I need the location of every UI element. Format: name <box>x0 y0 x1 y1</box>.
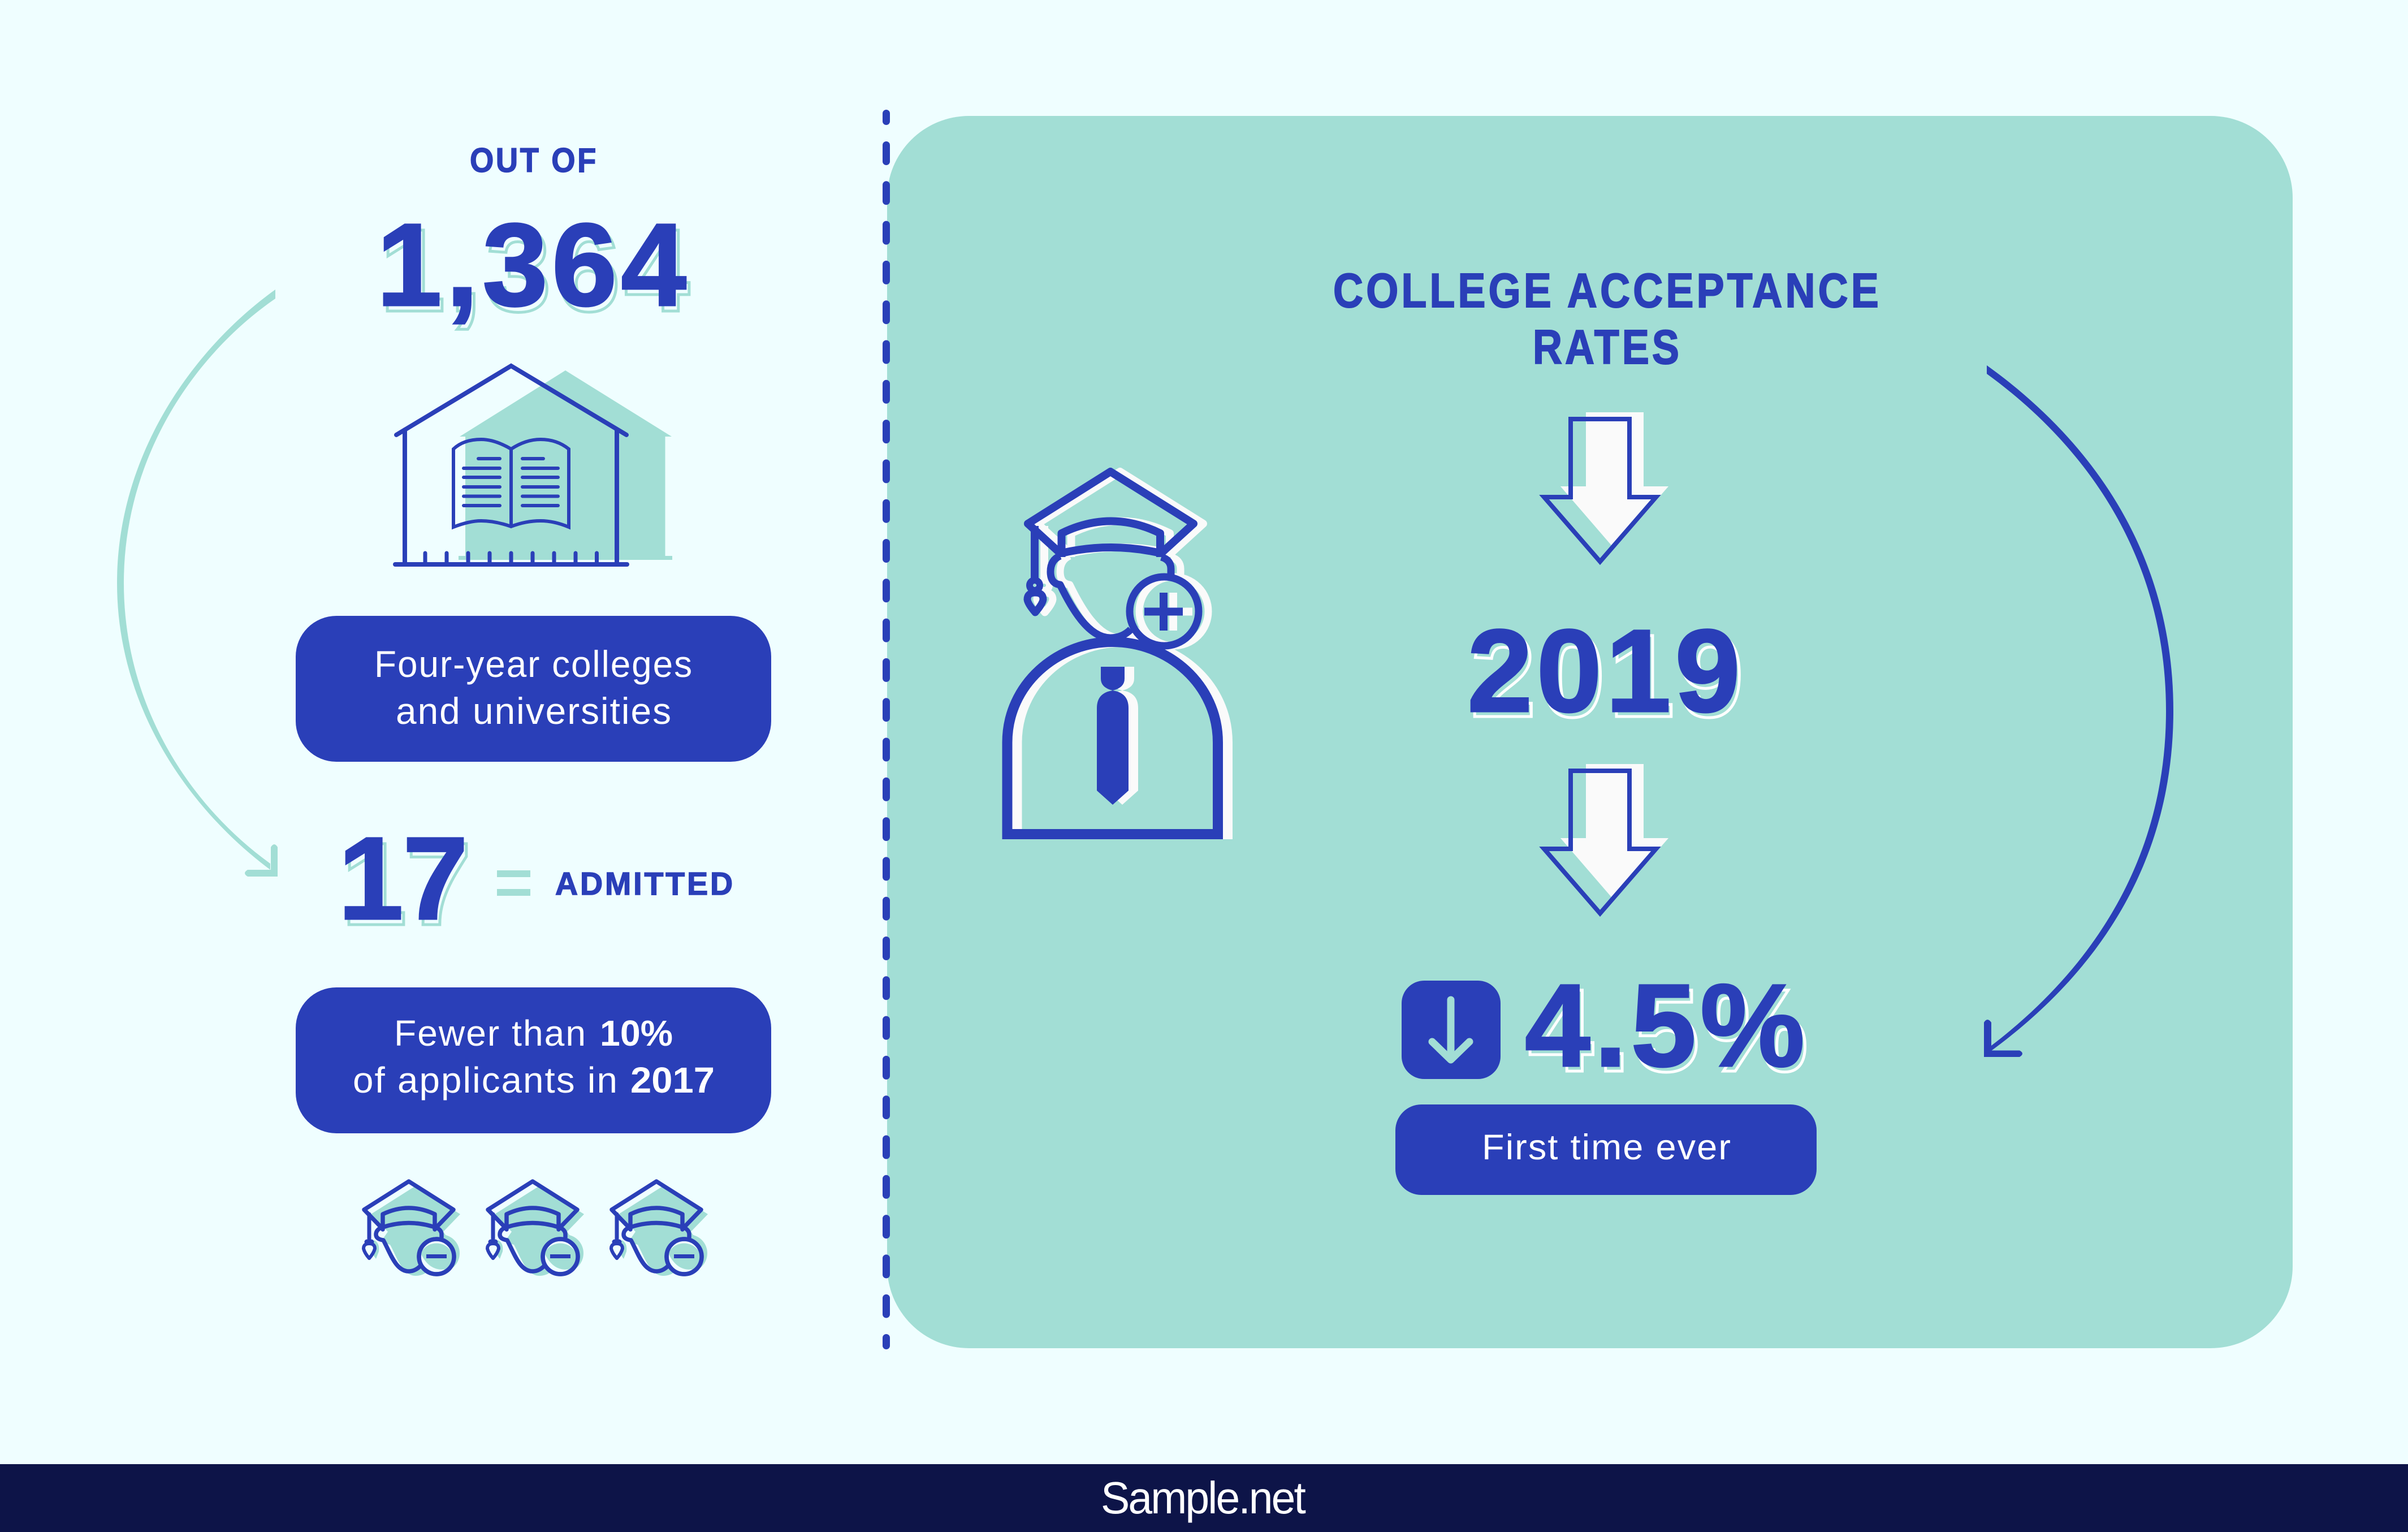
number: 1,364: 1,364 <box>380 205 690 336</box>
number: 2019: 2019 <box>1471 611 1744 742</box>
icon: accepted graduate <box>1008 472 1227 834</box>
pill: fewer than 10%: 10% <box>600 1013 673 1054</box>
icon part: teal house shadow <box>459 370 672 560</box>
pill: fewer than 10% <box>296 987 771 1133</box>
icon: rejected graduate 2 <box>487 1181 584 1276</box>
heading: college acceptance rates: RATES <box>1533 321 1682 374</box>
number: 17: 17 <box>338 813 468 944</box>
pill: fewer than 10%: of applicants in <box>353 1060 619 1101</box>
pill: four-year colleges: Four-year colleges <box>374 643 693 685</box>
equals sign <box>497 870 530 896</box>
number: 2019: 2019 <box>1467 606 1740 737</box>
number: 4.5%: 4.5% <box>1528 965 1808 1097</box>
icon: down arrow badge <box>1402 981 1501 1079</box>
icon part: house outline <box>395 366 627 564</box>
heading: college acceptance rates <box>1333 264 1882 374</box>
icon part: open book <box>453 439 569 527</box>
number: 1,364: 1,364 <box>377 200 686 331</box>
pill: first time ever: First time ever <box>1482 1128 1732 1167</box>
dashed divider <box>883 113 890 1346</box>
number: 17: 17 <box>341 819 472 950</box>
footer text: Sample.net <box>1101 1473 1306 1523</box>
heading: college acceptance rates: COLLEGE ACCEPTANCE <box>1333 264 1882 318</box>
pill: first time ever <box>1395 1104 1817 1195</box>
arrow: down to 2019 <box>1544 412 1668 562</box>
icon: rejected graduate 1 <box>364 1181 460 1276</box>
pill: fewer than 10%: Fewer than <box>394 1013 587 1054</box>
curved arrow: teal <box>117 290 278 877</box>
pill: fewer than 10%: 2017 <box>630 1060 715 1101</box>
panel: college acceptance rates <box>887 116 2293 1348</box>
label: out of: OUT OF <box>470 141 598 179</box>
footer bar <box>0 1464 2408 1532</box>
icon: college building with book <box>395 366 672 564</box>
label: admitted: ADMITTED <box>555 866 735 902</box>
curved arrow: blue <box>1984 365 2173 1057</box>
icon: rejected graduate 3 <box>611 1181 708 1276</box>
pill: four-year colleges <box>296 616 771 762</box>
number: 4.5%: 4.5% <box>1525 960 1805 1091</box>
pill: four-year colleges: and universities <box>396 690 672 732</box>
arrow: down to 4.5% <box>1544 764 1668 913</box>
